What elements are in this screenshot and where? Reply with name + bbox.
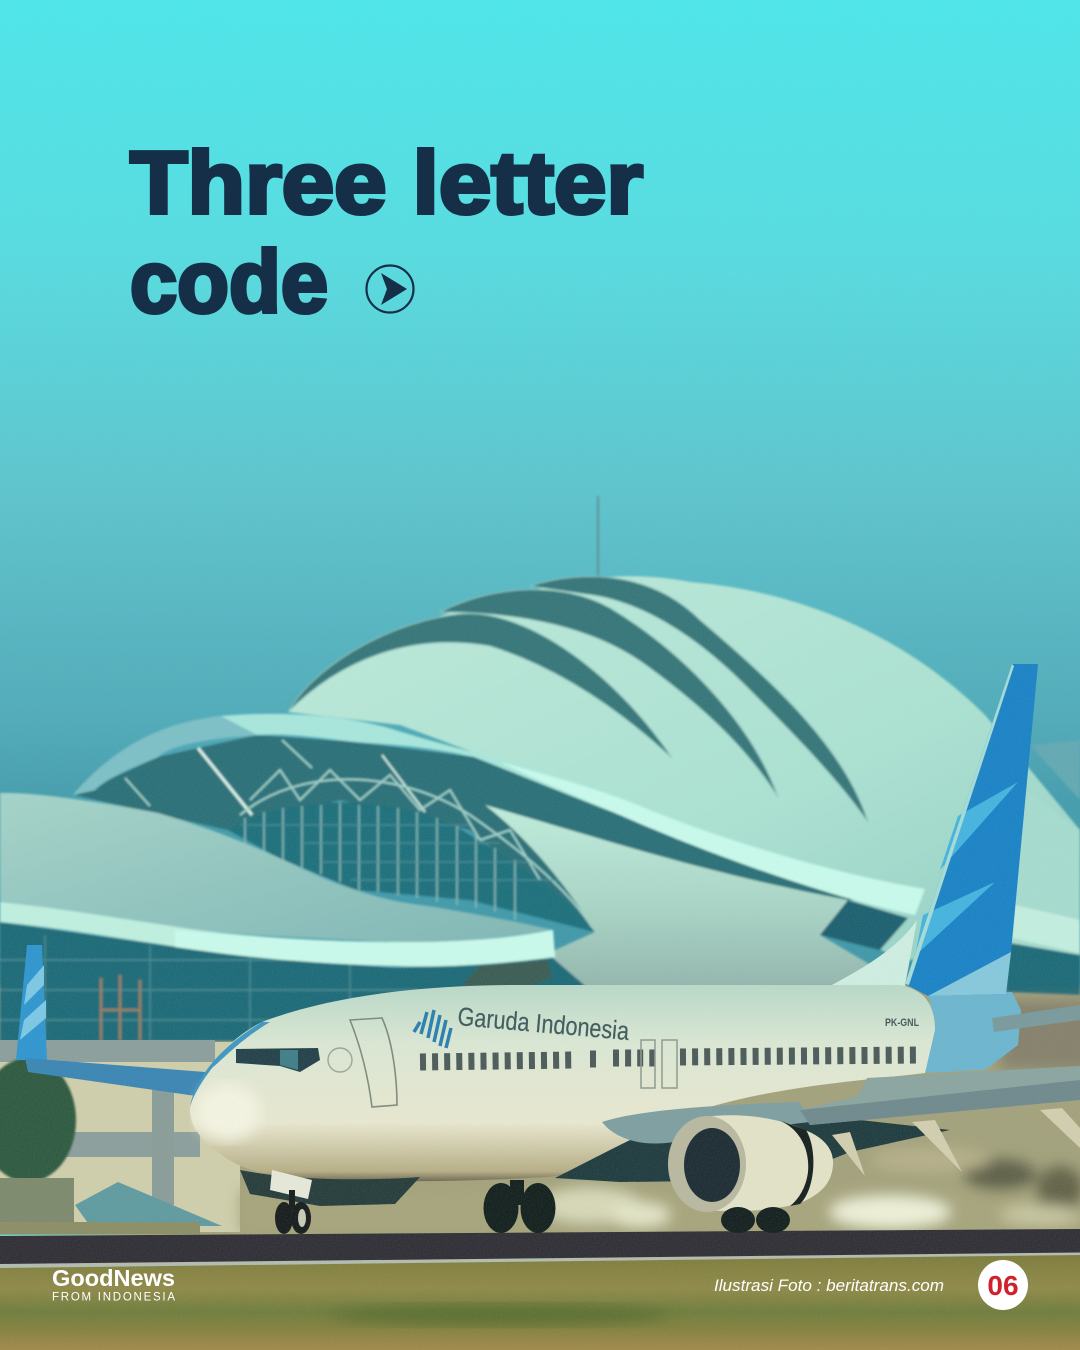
stabilizer stripes — [915, 782, 1018, 956]
tree — [0, 1058, 76, 1182]
runway — [0, 1229, 1080, 1266]
vertical stabilizer — [905, 664, 1038, 996]
photo credit: Ilustrasi Foto : beritatrans.com — [714, 1276, 944, 1295]
canopy light band — [73, 714, 925, 915]
lower glass wall — [0, 922, 590, 1042]
photo: airport terminal — [0, 496, 1080, 1042]
roundel emblem — [328, 1048, 352, 1072]
title line 1: Three letter — [130, 133, 643, 232]
logo: GoodNews: GoodNews — [52, 1265, 175, 1291]
blurred ground vegetation — [240, 1000, 1080, 1232]
page number badge — [978, 1260, 1028, 1310]
Garuda bird logo — [414, 1010, 451, 1048]
engine intake — [684, 1128, 740, 1202]
cockpit windows — [236, 1048, 320, 1072]
stabilizer pale root — [928, 952, 1011, 996]
horizontal stabilizer — [992, 1005, 1080, 1032]
nose gear door — [270, 1170, 312, 1199]
ground backdrop behind plane — [0, 985, 1080, 1235]
right gear wheels — [721, 1207, 790, 1233]
pillar — [152, 1090, 174, 1205]
logo: GoodNews — [52, 1265, 175, 1304]
right glass wall — [1006, 943, 1080, 995]
canopy underside dark truss — [75, 735, 860, 932]
far tail stripes — [20, 965, 46, 1040]
distant roof at right edge — [1030, 740, 1080, 800]
cockpit glass — [280, 1050, 298, 1070]
airplane — [16, 664, 1080, 1234]
glass arch — [228, 802, 595, 932]
dorsal fairing — [830, 920, 917, 986]
belly underside — [240, 1170, 420, 1206]
forward door — [350, 1018, 397, 1107]
icon: arrow in circle — [366, 266, 414, 312]
leading edge highlight — [905, 664, 1014, 985]
main gear wheels — [484, 1180, 556, 1233]
grass — [0, 1255, 1080, 1350]
tan strip — [0, 1222, 200, 1234]
low buildings — [0, 1042, 240, 1232]
glass arch mullions — [240, 803, 560, 920]
upper arch windows — [288, 577, 868, 822]
dark grass patch — [330, 1304, 670, 1326]
logo: GoodNews: FROM INDONESIA — [52, 1292, 175, 1304]
far wing — [25, 1058, 205, 1096]
truss highlights — [125, 740, 595, 932]
left roof — [0, 793, 553, 943]
wing edge — [800, 1080, 1080, 1125]
roof fascia brighter end — [175, 930, 555, 966]
airline name: Garuda Indonesia — [456, 1001, 631, 1046]
hedge — [0, 1178, 74, 1222]
flap track fairings — [832, 1108, 1080, 1176]
right roof band — [1012, 905, 1080, 953]
lower shell under canopy — [485, 805, 905, 990]
nose blue stripe — [190, 1022, 270, 1106]
runway white edge line — [0, 1252, 1080, 1268]
wing root fairing — [602, 1102, 810, 1144]
passenger windows — [420, 1055, 922, 1062]
grey beams — [0, 1040, 215, 1157]
sky background — [0, 0, 1080, 1000]
dark opening under roof — [462, 960, 552, 990]
fuselage — [190, 985, 935, 1181]
wing root shadow — [555, 1115, 950, 1182]
background ground zone — [0, 1000, 1080, 1234]
registration: PK-GNL — [885, 1017, 919, 1029]
upper dome shell — [288, 576, 1080, 960]
scaffolding — [101, 975, 140, 1040]
nose gear wheels — [275, 1190, 311, 1234]
shell right of tail — [1010, 790, 1080, 960]
mast — [597, 496, 599, 596]
engine band — [778, 1120, 813, 1206]
window beneath tail — [820, 900, 908, 950]
far tail fin — [16, 945, 47, 1060]
glazing grid lines — [0, 935, 500, 1040]
title — [130, 133, 643, 331]
page number badge: 06 — [987, 1270, 1019, 1301]
title line 2: code — [130, 232, 328, 331]
rear doors — [641, 1040, 677, 1088]
tent — [75, 1182, 222, 1226]
nose highlight — [196, 1084, 260, 1140]
tail cone — [925, 992, 1021, 1073]
engine nacelle — [705, 1115, 833, 1211]
left roof fascia — [0, 902, 555, 966]
engine intake rim — [668, 1116, 746, 1212]
wing — [800, 1066, 1080, 1125]
